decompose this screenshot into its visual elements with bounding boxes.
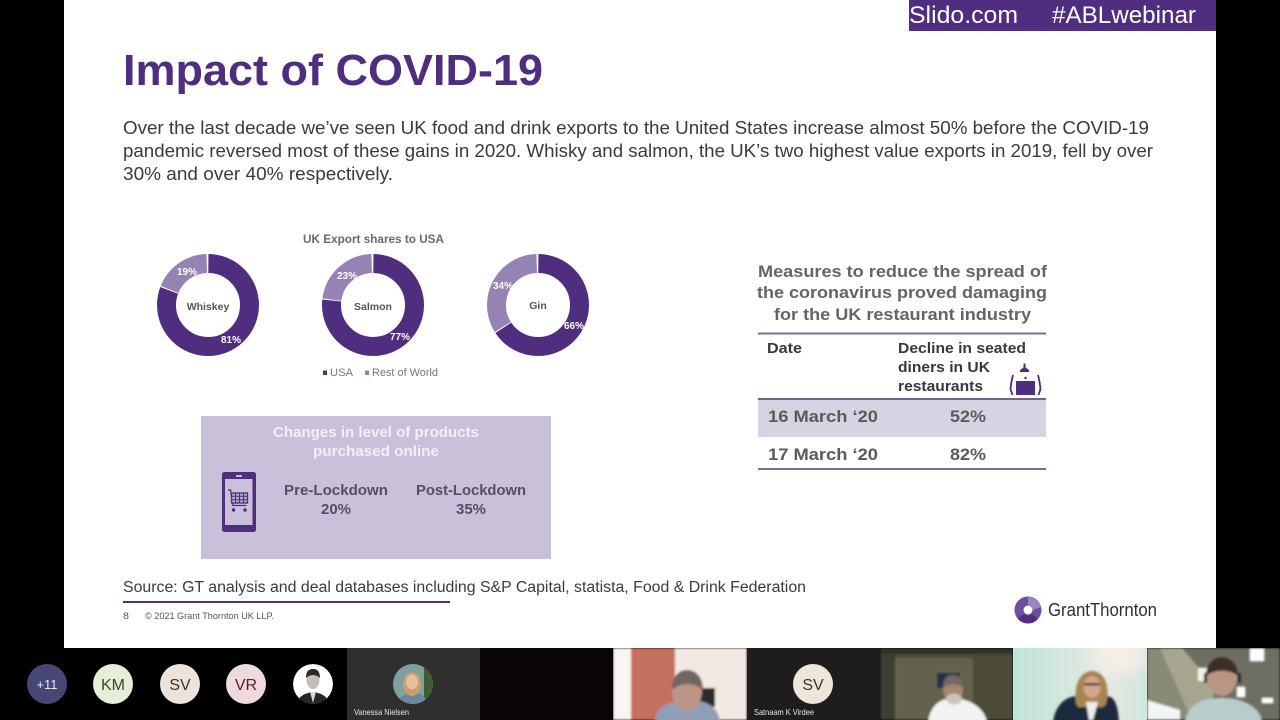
legend xyxy=(323,367,438,379)
stat: pre-lockdown: Pre-Lockdown xyxy=(284,483,388,499)
table heading: for the UK restaurant industry xyxy=(774,305,1032,324)
panel heading: purchased online xyxy=(313,444,439,460)
table header row: Date xyxy=(767,341,802,357)
video tile: Vanessa Nielsen xyxy=(347,648,480,720)
table row: 16 March xyxy=(758,398,1046,437)
participant avatars xyxy=(27,664,333,706)
video tile: man in white shirt xyxy=(880,648,1013,720)
video tile: man with headset xyxy=(1147,648,1280,720)
intro text block xyxy=(123,117,1153,184)
table heading xyxy=(757,262,1047,324)
donut chart: gin: 66% xyxy=(564,320,585,332)
table header row xyxy=(767,341,1026,395)
panel heading xyxy=(273,425,479,460)
panel heading: Changes in level of products xyxy=(273,425,479,441)
donut chart: whiskey: 19% xyxy=(177,266,198,278)
webinar banner: Slido.com xyxy=(909,2,1018,29)
legend: Rest of World xyxy=(372,367,438,379)
legend: USA xyxy=(330,367,354,379)
stat: pre-lockdown xyxy=(284,483,388,518)
panel: restaurant industry table xyxy=(757,262,1047,470)
table row: 17 March xyxy=(768,446,986,464)
intro text block: pandemic reversed most of these gains in 2020. Whisky and salmon, the UK’s two highest value exports in 2019, fell by over xyxy=(123,140,1153,161)
donut chart: whiskey xyxy=(154,251,262,359)
table row: 16 March: 52% xyxy=(950,408,986,426)
donut chart: salmon: Salmon xyxy=(354,301,392,313)
icon: restaurant table xyxy=(1010,364,1040,395)
panel: changes in online purchasing xyxy=(201,416,551,559)
avatar: +11: +11 xyxy=(36,677,58,692)
donut chart: salmon xyxy=(326,258,420,352)
donut chart: salmon: 77% xyxy=(390,331,411,343)
donut chart: gin xyxy=(481,248,595,362)
donut chart: gin: Gin xyxy=(529,300,547,312)
donut chart: salmon: 23% xyxy=(337,270,358,282)
intro text block: 30% and over 40% respectively. xyxy=(123,163,393,184)
table header row: restaurants xyxy=(898,379,983,395)
video tile: Satnaam K Virdee xyxy=(747,648,880,720)
stat: post-lockdown: Post-Lockdown xyxy=(416,483,526,499)
avatar: SV xyxy=(160,664,200,704)
donut chart: gin: 34% xyxy=(493,280,514,292)
stat: pre-lockdown: 20% xyxy=(321,502,351,518)
footer: © 2021 Grant Thornton UK LLP. xyxy=(145,611,274,622)
chart heading: UK Export shares to USA xyxy=(303,234,444,246)
table row: 17 March: 17 March ‘20 xyxy=(768,446,878,464)
table header row: diners in UK xyxy=(898,360,991,376)
table row: 17 March: 82% xyxy=(950,446,986,464)
video tile: Satnaam K Virdee: Satnaam K Virdee xyxy=(754,707,814,717)
avatar: KM xyxy=(93,664,133,704)
avatar: VR xyxy=(226,664,266,704)
stat: post-lockdown xyxy=(416,483,526,518)
avatar: man in suit xyxy=(293,664,333,706)
table header row: Decline in seated xyxy=(898,341,1026,357)
video tile: Vanessa Nielsen: Vanessa Nielsen xyxy=(354,707,409,717)
avatar: VR: VR xyxy=(235,677,257,694)
icon: phone with shopping cart xyxy=(222,472,256,532)
webinar banner xyxy=(909,0,1216,31)
table heading: the coronavirus proved damaging xyxy=(757,283,1047,302)
intro text block: Over the last decade we’ve seen UK food and drink exports to the United States increase almost 50% before the COVID-19 xyxy=(123,117,1149,138)
avatar: KM: KM xyxy=(101,677,125,694)
panel: UK export shares donut charts xyxy=(154,234,595,379)
video tile: Satnaam K Virdee: SV xyxy=(802,677,824,694)
donut chart: whiskey: 81% xyxy=(221,334,242,346)
webinar banner: #ABLwebinar xyxy=(1052,2,1196,29)
avatar: +11 xyxy=(27,664,67,704)
source note: Source: GT analysis and deal databases including S&P Capital, statista, Food & Drink Federation xyxy=(123,579,806,596)
logo: Grant Thornton xyxy=(1014,596,1157,624)
video tile: woman with glasses xyxy=(1013,648,1147,720)
video tile: man at desk xyxy=(613,648,747,720)
footer: 8 xyxy=(123,611,129,622)
title: Impact of COVID-19 xyxy=(123,46,543,95)
logo: Grant Thornton: GrantThornton xyxy=(1048,600,1157,620)
empty video tile xyxy=(480,648,613,720)
table row: 16 March: 16 March ‘20 xyxy=(768,408,878,426)
donut chart: whiskey: Whiskey xyxy=(187,301,229,313)
avatar: SV: SV xyxy=(169,677,191,694)
stat: post-lockdown: 35% xyxy=(456,502,486,518)
table heading: Measures to reduce the spread of xyxy=(758,262,1047,281)
